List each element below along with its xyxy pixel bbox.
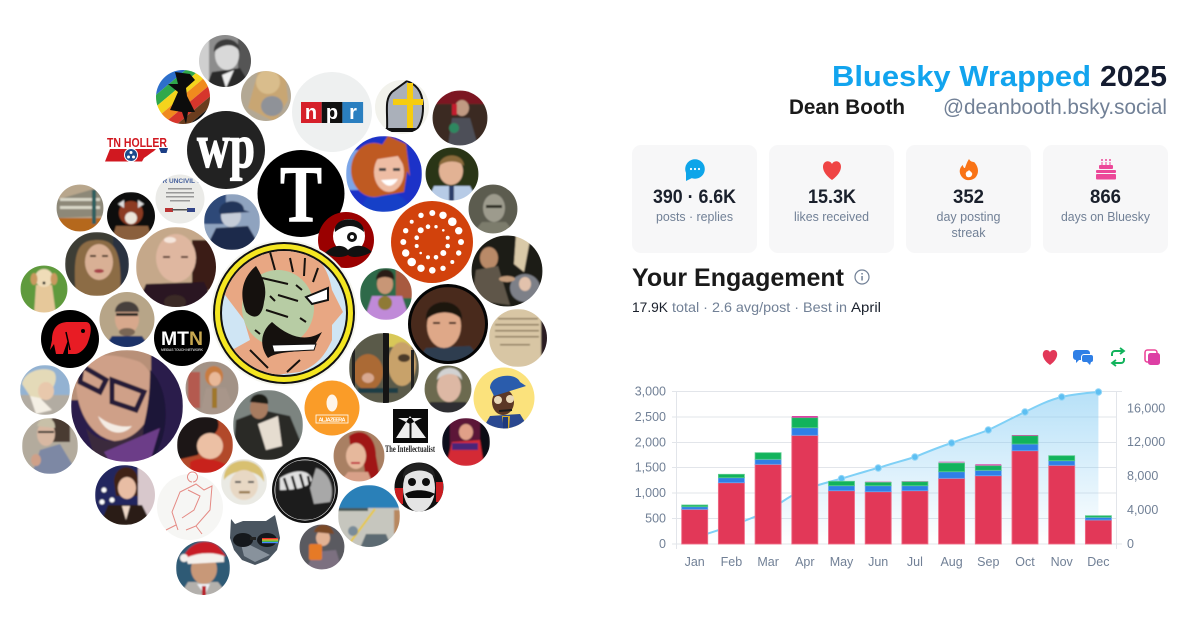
avatar: man with black ring border [408, 284, 488, 364]
avatar: bonnet lady [20, 365, 70, 415]
avatar: bald man in dark shirt [136, 227, 218, 309]
text: display name and handle [789, 96, 1167, 119]
avatar: MTN logo: MTN [161, 329, 203, 350]
avatar: man in grey suit speaking [22, 418, 78, 474]
logo: TN Holler: TN HOLLER [107, 136, 167, 150]
avatar: Al Jazeera logo: ALJAZEERA [318, 418, 346, 424]
month labels: Apr [795, 555, 815, 569]
left axis labels: 2,500 [635, 410, 666, 424]
avatar: cat with prism sunglasses [230, 515, 280, 565]
chart: monthly engagement stacked bars with cumulative line [635, 384, 1165, 569]
avatar: man in Santa hat [176, 541, 230, 596]
month labels: Jul [907, 555, 923, 569]
bars: quotes [792, 416, 1038, 482]
panel: stat card posting streak [906, 145, 1031, 253]
avatar: New York Times logo [258, 150, 344, 239]
avatar: man in black and white suit [199, 35, 251, 87]
month labels: Sep [977, 555, 999, 569]
avatar: grey-haired man [424, 365, 472, 414]
avatar: book cover: OUR UNCIVIL WA [153, 178, 208, 185]
left axis labels [635, 384, 666, 551]
panel: stat card posting streak: streak [952, 225, 986, 240]
legend icons [1043, 348, 1160, 366]
text: engagement summary [632, 299, 881, 315]
panel: stat card likes received: 15.3K [808, 187, 856, 208]
avatar: NPR logo: r [349, 102, 357, 124]
text: display name and handle: @deanbooth.bsky.social [943, 96, 1167, 119]
avatar: smiling man with glasses [100, 292, 154, 347]
avatar: woman holding chip bag [299, 524, 345, 570]
month labels: Aug [940, 555, 963, 569]
panel: stat card posts and replies: 390 · 6.6K [653, 187, 736, 208]
month labels: Dec [1087, 555, 1110, 569]
avatar: NPR logo: p [326, 102, 338, 124]
avatar: Al Jazeera logo [304, 380, 360, 436]
cumulative area [695, 392, 1098, 544]
avatar: Natty Boh mascot [318, 212, 374, 268]
avatar: New York Times logo: T [280, 151, 322, 239]
avatar: NPR logo: n [305, 102, 317, 124]
icon: info [855, 270, 869, 284]
icon: legend quote [1145, 350, 1160, 365]
right axis labels: 4,000 [1127, 503, 1158, 517]
avatar: large smiling man in purple tones [71, 350, 183, 462]
avatar: red elephant logo [41, 310, 99, 368]
month labels [685, 555, 1110, 569]
avatar: man in red light [442, 418, 490, 466]
bars: likes [682, 435, 1111, 544]
avatar: red line sketch on chair [157, 472, 223, 540]
right axis labels: 8,000 [1127, 469, 1158, 483]
text: engagement summary: total · 2.6 avg/post · Best in [672, 299, 847, 315]
avatar: tintype portrait [468, 184, 518, 234]
avatar: building [56, 184, 104, 232]
month labels: May [830, 555, 854, 569]
month labels: Jan [685, 555, 705, 569]
icon: chat bubble [685, 159, 705, 181]
month labels: Nov [1051, 555, 1074, 569]
avatar: golden puppy [20, 265, 68, 315]
title: Bluesky Wrapped 2025: 2025 [1100, 61, 1167, 93]
logo: TN Holler [105, 136, 168, 162]
title: Bluesky Wrapped 2025: Bluesky Wrapped [832, 61, 1091, 93]
avatar: rainbow pride silhouette [156, 70, 210, 124]
bars: replies [682, 428, 1111, 520]
avatar: MTN logo [154, 310, 210, 366]
icon: heart [823, 161, 841, 180]
avatar: motorcycle beach road [338, 485, 400, 548]
cumulative points [838, 389, 1102, 482]
left axis labels: 1,000 [635, 486, 666, 500]
avatar: man on red phone [432, 90, 488, 146]
avatar: book cover [156, 174, 204, 224]
right axis labels: 12,000 [1127, 435, 1165, 449]
text: engagement summary: April [851, 299, 881, 315]
avatar: two dogs behind bars [349, 333, 419, 403]
avatar: Washington Post logo: wp [197, 113, 255, 181]
avatar: 1920s illustrated woman [177, 417, 233, 473]
text: engagement summary: 17.9K [632, 299, 669, 315]
month labels: Feb [721, 555, 742, 569]
logo: The Intellectualist: The Intellectualist [385, 444, 435, 454]
avatar: cartoon man on yellow [473, 367, 535, 430]
avatar: man drinking coconut [360, 268, 412, 320]
avatar: mitre with yellow cross [375, 80, 429, 134]
avatar: NPR logo [292, 72, 372, 152]
panel: stat card days on Bluesky: 866 [1090, 187, 1121, 208]
panel: stat card posting streak: day posting [936, 209, 1000, 224]
right axis labels: 16,000 [1127, 402, 1165, 416]
avatar: man in dark jacket [233, 390, 304, 460]
panel: stat card posting streak: 352 [953, 187, 984, 208]
avatar: dog with toy [240, 70, 292, 122]
text: display name and handle: Dean Booth [789, 96, 905, 119]
avatar: red-haired woman [333, 430, 385, 482]
panel: stat card days on Bluesky [1043, 145, 1168, 253]
month labels: Mar [757, 555, 779, 569]
avatar: blond man illustration [221, 459, 267, 505]
icon: legend heart [1043, 350, 1057, 365]
avatar: mustached man black and red [394, 462, 444, 512]
panel: stat card posts and replies: posts · replies [656, 209, 733, 224]
month labels: Jun [868, 555, 888, 569]
cumulative line [695, 392, 1098, 538]
icon: birthday cake [1096, 159, 1116, 180]
avatar: old manuscript [489, 309, 549, 367]
heading: Your Engagement: Your Engagement [632, 264, 845, 292]
avatar: red panda [106, 192, 156, 240]
panel: stat card posts and replies [632, 145, 757, 253]
left axis labels: 500 [645, 512, 666, 526]
avatar: man in cap, blue tone [204, 194, 262, 250]
avatar: Rubens style painting [471, 235, 543, 307]
left axis labels: 2,000 [635, 436, 666, 450]
avatar: orange dotted ring logo [391, 201, 473, 283]
avatar: woman with long hair [65, 232, 129, 296]
left axis labels: 3,000 [635, 384, 666, 398]
icon: legend replies [1073, 350, 1093, 365]
avatar: woman with American flag [95, 465, 156, 525]
avatar: woman with flag and guitar [185, 361, 239, 415]
avatar: central comic monster in yellow ring [211, 240, 357, 386]
icon: flame [960, 159, 978, 180]
right axis labels [1127, 402, 1165, 551]
avatar: Washington Post logo [187, 111, 265, 189]
left axis labels: 1,500 [635, 460, 666, 474]
left axis labels: 0 [659, 537, 666, 551]
icon: legend repost [1112, 348, 1124, 366]
right axis labels: 0 [1127, 537, 1134, 551]
avatar: MTN logo: MEIDAS TOUCH NETWORK [161, 348, 203, 352]
panel: stat card likes received [769, 145, 894, 253]
avatar: man with glasses and tie [425, 147, 479, 202]
panel: stat card likes received: likes received [794, 209, 869, 224]
panel: stat card days on Bluesky: days on Bluesky [1061, 209, 1150, 224]
bars: reposts [682, 418, 1111, 517]
panel: avatar bubble cluster [20, 30, 549, 596]
logo: The Intellectualist [385, 409, 435, 454]
avatar: redhead on blue [346, 136, 422, 212]
month labels: Oct [1015, 555, 1035, 569]
avatar: Bride of Frankenstein black ring [272, 457, 338, 523]
